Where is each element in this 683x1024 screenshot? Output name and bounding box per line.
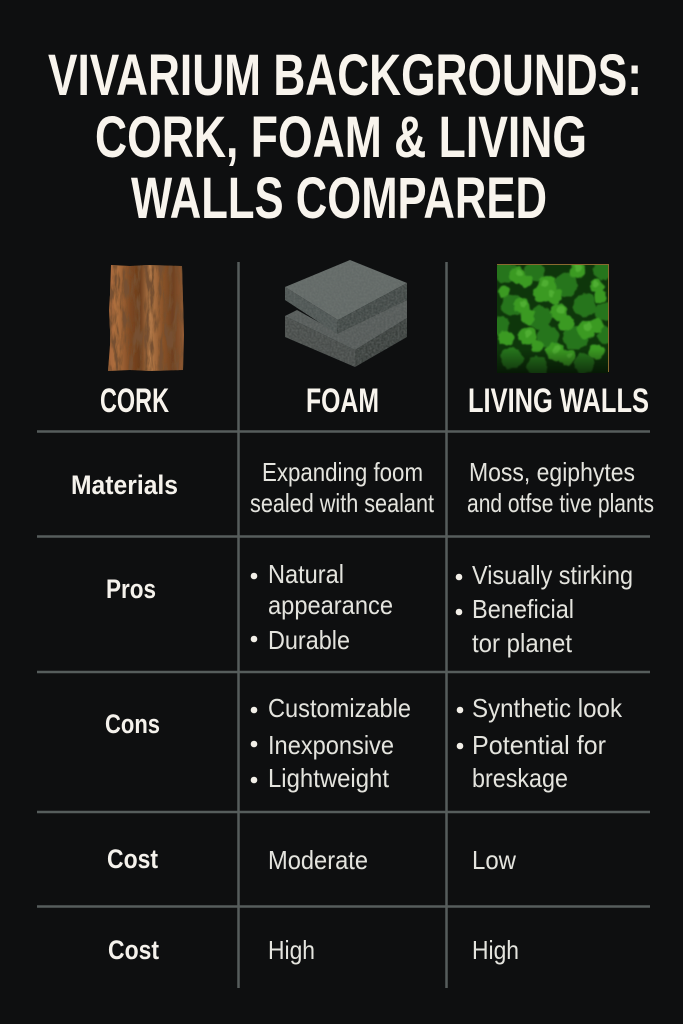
foam pros list [251,559,393,655]
foam cons list [251,693,411,793]
living walls cons list: Synthetic look [472,693,623,723]
living walls cost one: Low [472,845,516,875]
title: WALLS COMPARED [131,166,547,231]
icon: foam blocks [285,260,407,367]
icon: living wall moss [497,264,609,373]
row label: pros: Pros [106,574,156,604]
foam pros list: Durable [268,625,350,655]
table grid [37,262,650,988]
living walls materials text: Moss, egiphytes [469,457,635,487]
foam materials text: sealed with sealant [250,488,435,518]
living walls cons list [457,693,623,793]
foam cons list: Customizable [268,693,411,723]
column heading: foam: FOAM [306,382,379,420]
living walls pros list: tor planet [472,628,573,658]
living walls materials text [467,457,654,518]
foam materials text [250,457,435,518]
foam cost two: High [268,935,315,965]
foam cost one: Moderate [268,845,368,875]
foam pros list: Natural [268,559,344,589]
icon: cork bark [108,265,184,371]
living walls cons list: Potential for [472,730,606,760]
title [48,43,642,231]
foam materials text: Expanding foom [262,457,423,487]
row label: materials: Materials [71,470,178,500]
row label: cons: Cons [105,709,160,739]
living walls pros list: Visually stirking [472,560,633,590]
living walls cost two: High [472,935,519,965]
foam pros list: appearance [268,590,393,620]
row label: cost: Cost [107,844,158,874]
foam cons list: Inexponsive [268,730,394,760]
row label: cost second: Cost [108,935,159,965]
living walls pros list [456,560,633,658]
living walls pros list: Beneficial [472,594,574,624]
foam cons list: Lightweight [268,763,390,793]
column heading: cork: CORK [100,382,169,420]
living walls cons list: breskage [472,763,568,793]
